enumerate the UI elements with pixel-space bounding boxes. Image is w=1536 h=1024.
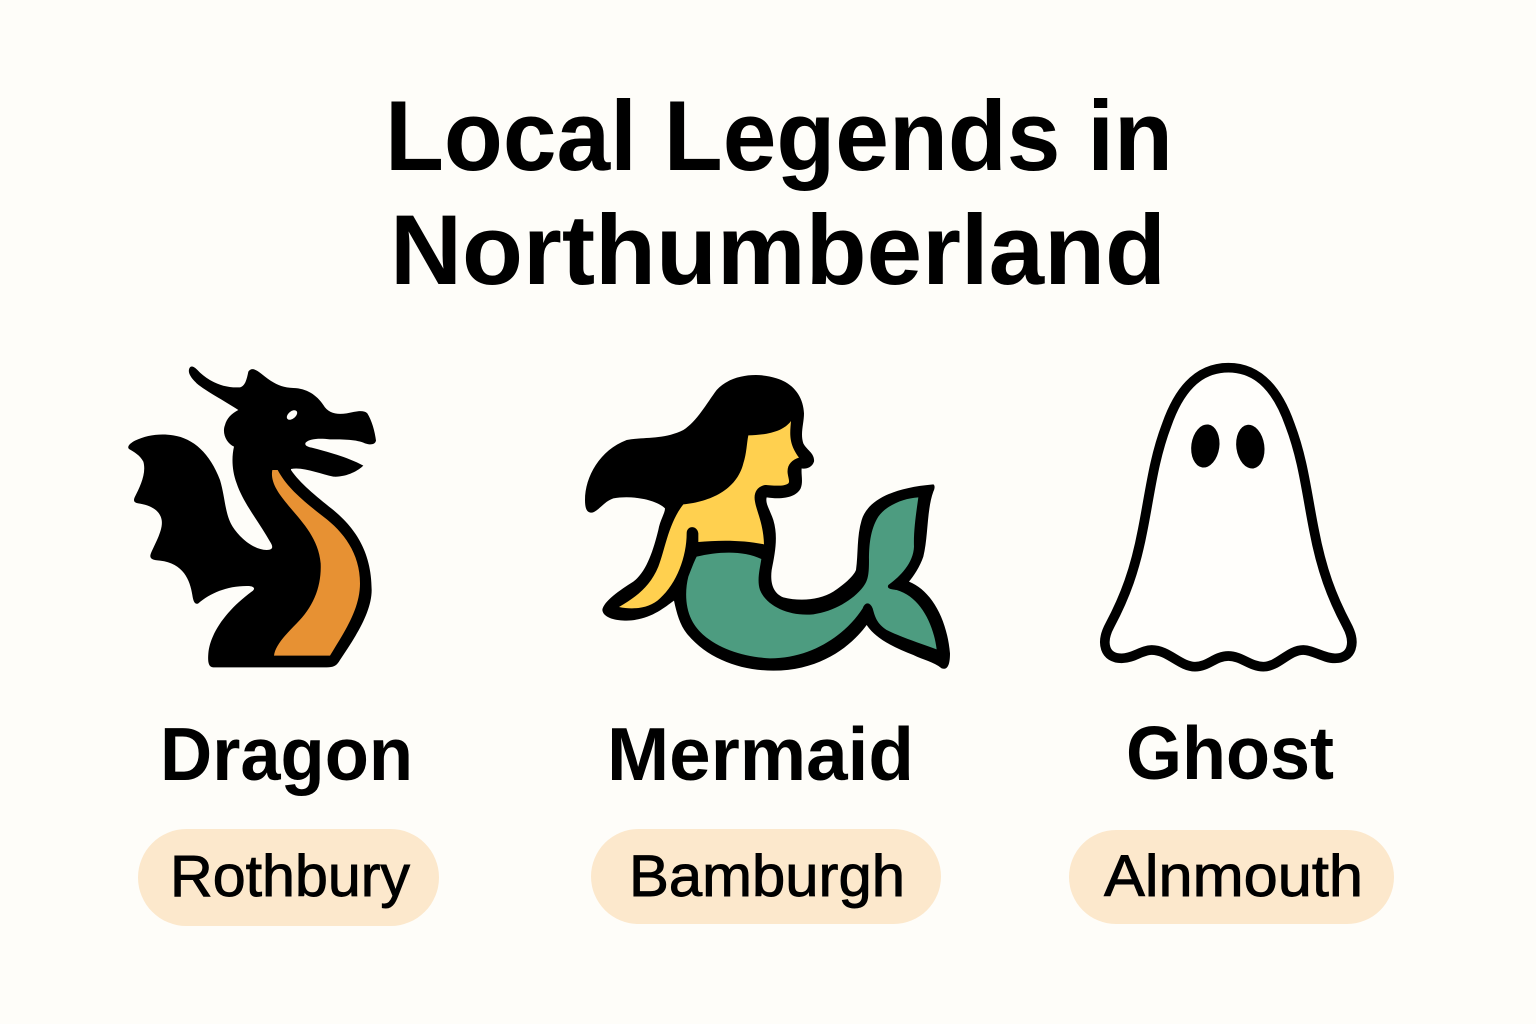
title: Local Legends in: [385, 80, 1173, 191]
location pill: Alnmouth: Alnmouth: [1104, 844, 1363, 909]
label: Dragon: Dragon: [160, 712, 413, 796]
location pill: Bamburgh: Bamburgh: [629, 844, 905, 909]
panel: dragon: [128, 367, 439, 926]
icon: dragon: [128, 367, 376, 667]
label: Ghost: Ghost: [1126, 711, 1334, 795]
location pill: Bamburgh: [591, 829, 941, 924]
panel: ghost: [1069, 368, 1394, 924]
title: Northumberland: [390, 194, 1166, 305]
title: [385, 80, 1173, 305]
label: Mermaid: Mermaid: [607, 712, 914, 796]
location pill: Rothbury: Rothbury: [170, 844, 410, 909]
icon: ghost: [1105, 368, 1352, 667]
location pill: Alnmouth: [1069, 830, 1394, 924]
location pill: Rothbury: [138, 829, 439, 926]
icon: mermaid: [585, 375, 950, 671]
panel: mermaid: [585, 375, 950, 924]
